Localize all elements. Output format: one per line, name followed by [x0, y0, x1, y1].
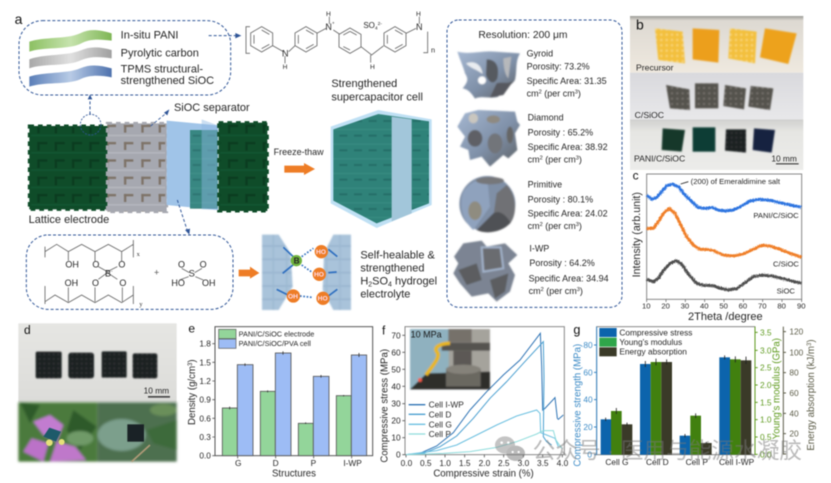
text: I-WP properties: Specific Area: 34.94 — [529, 274, 609, 284]
panel f: stress strain chart: 40 — [391, 381, 401, 391]
text: gyroid properties: Porosity: 73.2% — [527, 62, 590, 72]
callout: hydrogel chemistry: O — [200, 259, 207, 269]
panel f: stress strain chart: 60 — [391, 347, 401, 357]
panel b: sample photos: Precursor — [636, 62, 674, 72]
panel c: XRD chart: Intensity (arb.unit) — [631, 192, 643, 277]
panel c: XRD chart: (200) of Emeraldimine salt — [691, 177, 781, 186]
panel label a: a — [15, 11, 23, 27]
PANI chemical structure — [246, 11, 435, 71]
panel g: triple-axis bar chart: 60 — [789, 388, 799, 398]
text: diamond properties: Diamond — [528, 113, 564, 123]
panel g: triple-axis bar chart: g — [573, 323, 580, 337]
panel a: supercapacitor schematic — [15, 11, 437, 310]
panel b: sample photos — [630, 16, 803, 170]
panel b: sample photos: PANI/C/SiOC — [634, 154, 685, 164]
arrow: separator to hydrogel — [177, 200, 190, 235]
text: gyroid properties: cm — [527, 88, 581, 98]
callout: hydrogel chemistry: x — [137, 251, 141, 258]
panel f: stress strain chart: 3.0 — [518, 458, 530, 468]
panel c: XRD chart: C/SiOC — [773, 260, 799, 269]
panel g: triple-axis bar chart: 100 — [789, 347, 804, 357]
panel e: density bar chart: G — [235, 458, 241, 468]
panel f: stress strain chart: Cell D — [429, 409, 451, 419]
panel e: density bar chart: 3 — [188, 362, 194, 366]
panel c: XRD chart: c — [633, 168, 639, 182]
panel g: triple-axis bar chart: Compressive stress — [619, 327, 692, 337]
panel b: sample photos: 10 mm — [771, 153, 797, 163]
panel c: XRD chart: 40 — [700, 302, 709, 311]
PANI chemical structure: H — [416, 11, 421, 18]
panel f: stress strain chart: 3.5 — [537, 458, 549, 468]
inset photo: 10 MPa: 10 MPa — [411, 330, 442, 340]
panel e: density bar chart: 1.8 — [199, 339, 211, 349]
panel f: stress strain chart: 20 — [391, 416, 401, 426]
panel f: stress strain chart: Cell P — [429, 429, 451, 439]
caption: hydrogel electrolyte: SO — [372, 276, 388, 288]
panel g: triple-axis bar chart: 1.0 — [760, 415, 772, 425]
panel d: photos — [18, 322, 373, 480]
PANI chemical structure: + — [332, 21, 335, 26]
panel e: density bar chart: e — [188, 322, 195, 336]
panel f: stress strain chart: f — [382, 324, 386, 338]
callout: electrode layers: strengthened SiOC — [121, 75, 214, 87]
freeze-thaw arrow: Freeze-thaw — [274, 147, 324, 157]
panel f: stress strain chart: 0.0 — [401, 458, 413, 468]
icon: primitive — [459, 176, 515, 232]
hydrogel bonding diagram: HO — [318, 296, 328, 303]
text: primitive properties: cm — [528, 221, 582, 231]
panel g: triple-axis bar chart — [573, 323, 817, 467]
callout: hydrogel chemistry: O — [118, 260, 125, 270]
text: primitive properties: (per cm — [543, 221, 576, 231]
callout: hydrogel chemistry: HO — [171, 278, 185, 288]
panel f: stress strain chart: 1.5 — [459, 458, 471, 468]
panel f: stress strain chart: 4.0 — [557, 458, 569, 468]
text: I-WP properties: ) — [580, 286, 583, 296]
panel c: XRD chart: 90 — [797, 302, 806, 311]
PANI chemical structure: 4 — [375, 26, 378, 32]
text: I-WP properties: 2 — [541, 287, 544, 293]
callout: hydrogel chemistry: OH — [202, 278, 215, 288]
text: primitive properties: 2 — [540, 222, 543, 228]
callout: hydrogel chemistry: O — [92, 278, 99, 288]
text: diamond properties: Porosity : 65.2% — [528, 128, 593, 138]
panel g: triple-axis bar chart: Young's modulus (GPa) — [771, 338, 782, 439]
PANI chemical structure: SO — [363, 21, 375, 30]
panel g: triple-axis bar chart: 60 — [583, 367, 593, 377]
caption: strengthened supercapacitor cell: Strengthened — [331, 78, 397, 90]
callout: electrode layers: Pyrolytic carbon — [121, 47, 199, 59]
panel e: density bar chart: PANI/C/SiOC electrode — [239, 330, 314, 339]
panel f: stress strain chart: 2.5 — [498, 458, 510, 468]
text: I-WP properties: Porosity : 64.2% — [529, 258, 595, 268]
panel g: triple-axis bar chart: Cell P — [686, 457, 708, 467]
watermark: 公众号 · 医用与能源水凝胶 — [533, 437, 802, 463]
panel g: triple-axis bar chart: Energy absorption (kJ/m — [806, 346, 817, 451]
hydrogel bonding diagram — [262, 235, 351, 310]
callout: hydrogel chemistry: O — [178, 259, 185, 269]
panel f: stress strain chart: Compressive stress (MPa) — [379, 349, 390, 463]
callout: electrode layers: TPMS structural- — [121, 64, 203, 76]
caption: hydrogel electrolyte: 4 — [388, 282, 392, 289]
caption: hydrogel electrolyte: 2 — [368, 282, 372, 289]
panel f: stress strain chart: 50 — [391, 364, 401, 374]
panel f: stress strain chart: 0.5 — [420, 458, 432, 468]
panel f: stress strain chart: 30 — [391, 399, 401, 409]
panel g: triple-axis bar chart: 120 — [789, 327, 804, 337]
PANI chemical structure: H — [370, 64, 375, 71]
panel g: triple-axis bar chart: 80 — [583, 340, 593, 350]
caption: strengthened supercapacitor cell: supercapacitor cell — [331, 92, 423, 104]
panel f: stress strain chart: 2.0 — [479, 458, 491, 468]
panel g: triple-axis bar chart: 2.5 — [760, 363, 772, 373]
panel b: sample photos: C/SiOC — [635, 110, 664, 120]
panel e: density bar chart: Structures — [272, 469, 316, 480]
panel f: stress strain chart: Cell I-WP — [429, 400, 464, 410]
text: I-WP properties: 3 — [577, 287, 580, 293]
text: gyroid properties: Gyroid — [527, 48, 553, 58]
icon: diamond — [457, 110, 520, 167]
panel g: triple-axis bar chart: 2.0 — [760, 380, 772, 390]
callout: hydrogel chemistry: O — [119, 278, 126, 288]
PANI chemical structure: N — [416, 22, 422, 32]
lattice electrode assembly — [29, 119, 267, 212]
caption: hydrogel electrolyte: strengthened — [360, 263, 424, 275]
caption: hydrogel electrolyte: H — [360, 276, 437, 289]
text: I-WP properties: cm — [529, 286, 583, 296]
panel e: density bar chart: 0.9 — [199, 395, 211, 405]
caption: hydrogel electrolyte: Self-healable & — [360, 250, 435, 262]
panel f: stress strain chart: Compressive strain (%) — [433, 469, 534, 480]
x axis title of panel c: 2Theta /degree — [688, 311, 763, 323]
panel f: stress strain chart: 70 — [391, 330, 401, 340]
text: gyroid properties: ) — [578, 88, 581, 98]
freeze-thaw arrow — [274, 147, 324, 175]
TPMS panel — [447, 20, 622, 307]
text: I-WP properties: (per cm — [544, 286, 577, 296]
panel c: XRD chart: 50 — [719, 302, 728, 311]
panel e: density bar chart: ) — [187, 359, 198, 363]
panel g: triple-axis bar chart: 80 — [789, 368, 799, 378]
icon: gyroid — [457, 51, 520, 99]
hydrogel bonding diagram: HO — [316, 249, 326, 256]
label: SiOC separator — [151, 102, 250, 126]
panel e: density bar chart: 0.6 — [199, 413, 211, 423]
text: I-WP properties: I-WP — [529, 243, 549, 253]
PANI chemical structure: N — [325, 22, 332, 32]
panel g: triple-axis bar chart: 20 — [583, 422, 593, 432]
panel c: XRD chart: PANI/C/SiOC — [753, 211, 799, 220]
text: diamond properties: 3 — [576, 155, 579, 161]
inset photo: 10 MPa — [410, 329, 490, 389]
panel f: stress strain chart: 0 — [396, 450, 401, 460]
panel g: triple-axis bar chart: 1.5 — [760, 397, 772, 407]
text: primitive properties: 3 — [576, 222, 579, 228]
panel g: triple-axis bar chart: 3.0 — [760, 345, 772, 355]
PANI chemical structure: H — [283, 64, 288, 71]
text: diamond properties: Specific Area: 38.92 — [528, 142, 608, 152]
hydrogel bonding diagram: OH — [288, 293, 298, 300]
panel c: XRD chart — [631, 168, 806, 311]
panel g: triple-axis bar chart: 40 — [583, 395, 593, 405]
sample photo: d — [24, 323, 31, 337]
caption: hydrogel electrolyte: hydrogel — [392, 276, 437, 288]
panel e: density bar chart: D — [273, 458, 279, 468]
icon: I-WP — [453, 241, 517, 302]
label: lattice electrode: Lattice electrode — [29, 214, 109, 226]
PANI chemical structure: H — [326, 11, 331, 18]
panel g: triple-axis bar chart: Cell G — [605, 457, 628, 467]
panel g: triple-axis bar chart: Cell I-WP — [719, 457, 755, 467]
text: diamond properties: ) — [579, 154, 582, 164]
panel e: density bar chart: I-WP — [343, 458, 362, 468]
panel g: triple-axis bar chart: 20 — [789, 429, 799, 439]
panel e: density bar chart — [187, 322, 373, 480]
panel g: triple-axis bar chart: ) — [806, 339, 817, 343]
PANI chemical structure: N — [282, 49, 288, 59]
panel e: density bar chart: Density (g/cm — [187, 366, 198, 425]
text: primitive properties: Porosity : 80.1% — [528, 194, 593, 204]
panel f: stress strain chart: 10 — [391, 433, 401, 443]
panel g: triple-axis bar chart: Young's modulus — [619, 337, 682, 347]
panel e: density bar chart: P — [311, 458, 317, 468]
PANI chemical structure: n — [431, 46, 435, 55]
panel g: triple-axis bar chart: Cell D — [646, 457, 669, 467]
callout: hydrogel chemistry: O — [92, 260, 99, 270]
hydrogel bonding diagram: HO — [314, 272, 324, 279]
callout: hydrogel chemistry: OH — [65, 260, 79, 270]
panel e: density bar chart: 1.5 — [199, 357, 211, 367]
text: diamond properties: cm — [528, 154, 582, 164]
callout: electrode layers — [19, 21, 231, 95]
panel g: triple-axis bar chart: 3 — [807, 342, 813, 346]
caption: hydrogel electrolyte: electrolyte — [360, 289, 410, 301]
sample photo: 10 mm — [144, 385, 169, 395]
hydrogel bonding diagram: B — [294, 256, 300, 266]
text: primitive properties: Specific Area: 24.02 — [528, 209, 608, 219]
callout: hydrogel chemistry: S — [189, 269, 195, 279]
panel c: XRD chart: 70 — [758, 302, 767, 311]
callout: hydrogel chemistry: + — [154, 267, 159, 277]
text: primitive properties: Primitive — [528, 179, 562, 189]
panel c: XRD chart: 60 — [739, 302, 747, 311]
text: diamond properties: 2 — [540, 155, 543, 161]
callout: hydrogel chemistry: y — [139, 301, 143, 308]
panel: TPMS structures and panels b, c — [447, 16, 806, 311]
text: gyroid properties: 2 — [539, 89, 542, 95]
panel e: density bar chart: PANI/C/SiOC/PVA cell — [239, 339, 311, 348]
panel g: triple-axis bar chart: Compressive strength (MPa) — [573, 344, 584, 467]
panel c: XRD chart: 30 — [681, 302, 689, 311]
text: gyroid properties: (per cm — [542, 88, 575, 98]
text: primitive properties: ) — [579, 221, 582, 231]
panel e: density bar chart: 0.0 — [199, 451, 211, 461]
panel e: density bar chart: 0.3 — [199, 432, 211, 442]
assembled cell — [331, 110, 432, 228]
magnifier circle and arrow to callout — [80, 95, 101, 135]
text: gyroid properties: Specific Area: 31.35 — [527, 76, 607, 86]
arrow: layers to PANI structure — [209, 33, 241, 38]
panel g: triple-axis bar chart: 0.5 — [760, 432, 772, 442]
callout: hydrogel chemistry: OH — [65, 278, 78, 288]
panel g: triple-axis bar chart: Energy absorption — [619, 347, 687, 357]
panels f and g: mechanical charts — [379, 323, 817, 480]
label: SiOC separator: SiOC separator — [174, 102, 250, 114]
panel c: XRD chart: SiOC — [777, 286, 795, 295]
panel c: XRD chart: 20 — [661, 302, 670, 311]
callout: hydrogel chemistry: - — [111, 269, 113, 274]
panel f: stress strain chart: 1.0 — [439, 458, 451, 468]
callout: hydrogel chemistry: B — [105, 269, 111, 279]
panel e: density bar chart: 1.2 — [199, 376, 211, 386]
panel g: triple-axis bar chart: 3.5 — [760, 327, 772, 337]
text: diamond properties: (per cm — [543, 154, 576, 164]
panel b: sample photos: b — [636, 16, 644, 32]
text: gyroid properties: 3 — [575, 89, 578, 95]
panel g: triple-axis bar chart: 0 — [587, 450, 592, 460]
panel g: triple-axis bar chart: 0.0 — [760, 449, 772, 459]
callout: hydrogel chemistry — [26, 235, 233, 309]
TPMS panel: Resolution: 200 μm — [478, 30, 568, 41]
panel g: triple-axis bar chart: 40 — [789, 408, 799, 418]
flower photo — [18, 402, 177, 462]
panel c: XRD chart: 80 — [777, 302, 786, 311]
panel c: XRD chart: 10 — [642, 302, 651, 311]
orange arrow to hydrogel — [239, 267, 259, 279]
PANI chemical structure: 2- — [378, 21, 382, 27]
callout: electrode layers: In-situ PANI — [121, 30, 178, 42]
sample photo — [18, 323, 177, 402]
panel f: stress strain chart — [379, 324, 569, 480]
panel f: stress strain chart: Cell G — [429, 419, 452, 429]
